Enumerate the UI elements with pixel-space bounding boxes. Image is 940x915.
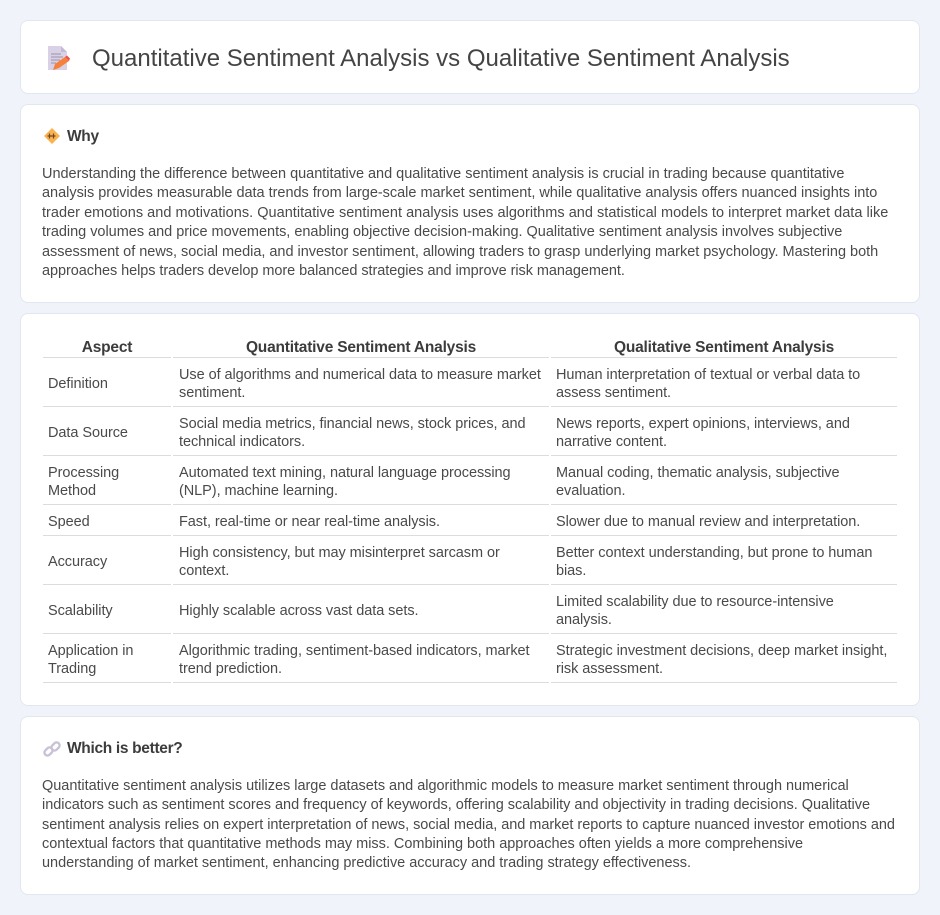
table header: aspect: Aspect: [82, 339, 132, 356]
text block: which is better: Quantitative sentiment analysis utilizes large datasets and algorithmic models to measure market sentiment through numerical: [42, 778, 849, 794]
comparison table: [43, 339, 897, 683]
title: Quantitative Sentiment Analysis vs Qualitative Sentiment Analysis: [92, 45, 790, 72]
row: processing method: Processing: [48, 465, 119, 481]
heading: which is better: Which is better?: [67, 740, 182, 757]
row: definition: assess sentiment.: [556, 385, 671, 401]
row: application in trading: Algorithmic trading, sentiment-based indicators, market: [179, 643, 530, 659]
row: processing method: evaluation.: [556, 483, 625, 499]
row: accuracy: High consistency, but may misinterpret sarcasm or: [179, 545, 500, 561]
row: data source: [48, 416, 850, 450]
row: speed: [48, 514, 860, 530]
row: definition: sentiment.: [179, 385, 245, 401]
panel: which is better: [20, 716, 920, 895]
panel: why: [20, 104, 920, 303]
row: speed: Speed: [48, 514, 90, 530]
row: speed: Fast, real-time or near real-time analysis.: [179, 514, 440, 530]
text block: why: Understanding the difference between quantitative and qualitative sentiment analysis is crucial in trading because quantitative: [42, 166, 844, 182]
text block: why: assessment of news, social media, and investor sentiment, allowing traders to grasp underlying market psychology. Mastering both: [42, 244, 878, 260]
row: speed: Slower due to manual review and interpretation.: [556, 514, 860, 530]
panel: comparison table card: [20, 313, 920, 706]
text block: which is better: indicators such as sentiment scores and frequency of keywords, offering scalability and objectivity in trading decisions. Qualitative: [42, 797, 870, 813]
row: definition: Use of algorithms and numerical data to measure market: [179, 367, 541, 383]
row: processing method: Manual coding, thematic analysis, subjective: [556, 465, 839, 481]
row: scalability: Scalability: [48, 603, 113, 619]
table header: qualitative: Qualitative Sentiment Analysis: [614, 339, 834, 356]
row: accuracy: Better context understanding, but prone to human: [556, 545, 872, 561]
row: processing method: [48, 465, 839, 499]
row: accuracy: [48, 545, 872, 579]
row: data source: Data Source: [48, 425, 128, 441]
row: application in trading: trend prediction.: [179, 661, 282, 677]
row: accuracy: bias.: [556, 563, 586, 579]
row: accuracy: context.: [179, 563, 229, 579]
text block: which is better: [42, 778, 895, 871]
text block: why: analysis provides measurable data trends from large-scale market sentiment, while qualitative analysis offers nuanced insights into: [42, 185, 877, 201]
row: application in trading: Strategic investment decisions, deep market insight,: [556, 643, 887, 659]
row: scalability: Limited scalability due to resource-intensive: [556, 594, 834, 610]
row: processing method: Automated text mining, natural language processing: [179, 465, 511, 481]
panel: title card: [20, 20, 920, 94]
row: data source: News reports, expert opinions, interviews, and: [556, 416, 850, 432]
row: application in trading: Application in: [48, 643, 133, 659]
table header: quantitative: Quantitative Sentiment Analysis: [246, 339, 476, 356]
text block: why: [42, 166, 888, 279]
row: application in trading: risk assessment.: [556, 661, 663, 677]
row: scalability: analysis.: [556, 612, 612, 628]
row: data source: narrative content.: [556, 434, 667, 450]
row: scalability: Highly scalable across vast data sets.: [179, 603, 418, 619]
row: application in trading: [48, 643, 887, 677]
text block: which is better: sentiment analysis relies on expert interpretation of news, social media, and market reports to capture nuanced investor emotions and: [42, 817, 895, 833]
row: definition: [48, 367, 860, 401]
text block: which is better: contextual factors that quantitative methods may miss. Combining both approaches often yields a more comprehensive: [42, 836, 803, 852]
row: definition: Definition: [48, 376, 108, 392]
icon: document with pencil: [48, 46, 70, 70]
row: accuracy: Accuracy: [48, 554, 107, 570]
text block: why: approaches helps traders develop more balanced strategies and improve risk management.: [42, 263, 625, 279]
row: data source: technical indicators.: [179, 434, 305, 450]
row: definition: Human interpretation of textual or verbal data to: [556, 367, 860, 383]
row: application in trading: Trading: [48, 661, 96, 677]
row: processing method: (NLP), machine learning.: [179, 483, 338, 499]
icon: chain link: [43, 741, 61, 757]
heading: why: Why: [67, 128, 99, 145]
row: data source: Social media metrics, financial news, stock prices, and: [179, 416, 525, 432]
icon: orange diamond: [44, 128, 60, 144]
row: processing method: Method: [48, 483, 96, 499]
text block: why: trader emotions and motivations. Quantitative sentiment analysis uses algorithms and statistical models to interpret market data like: [42, 205, 888, 221]
row: scalability: [48, 594, 834, 628]
text block: which is better: understanding of market sentiment, enhancing predictive accuracy and trading strategy effectiveness.: [42, 855, 691, 871]
text block: why: trading volumes and price movements, enabling objective decision-making. Qualitative sentiment analysis involves subjective: [42, 224, 842, 240]
